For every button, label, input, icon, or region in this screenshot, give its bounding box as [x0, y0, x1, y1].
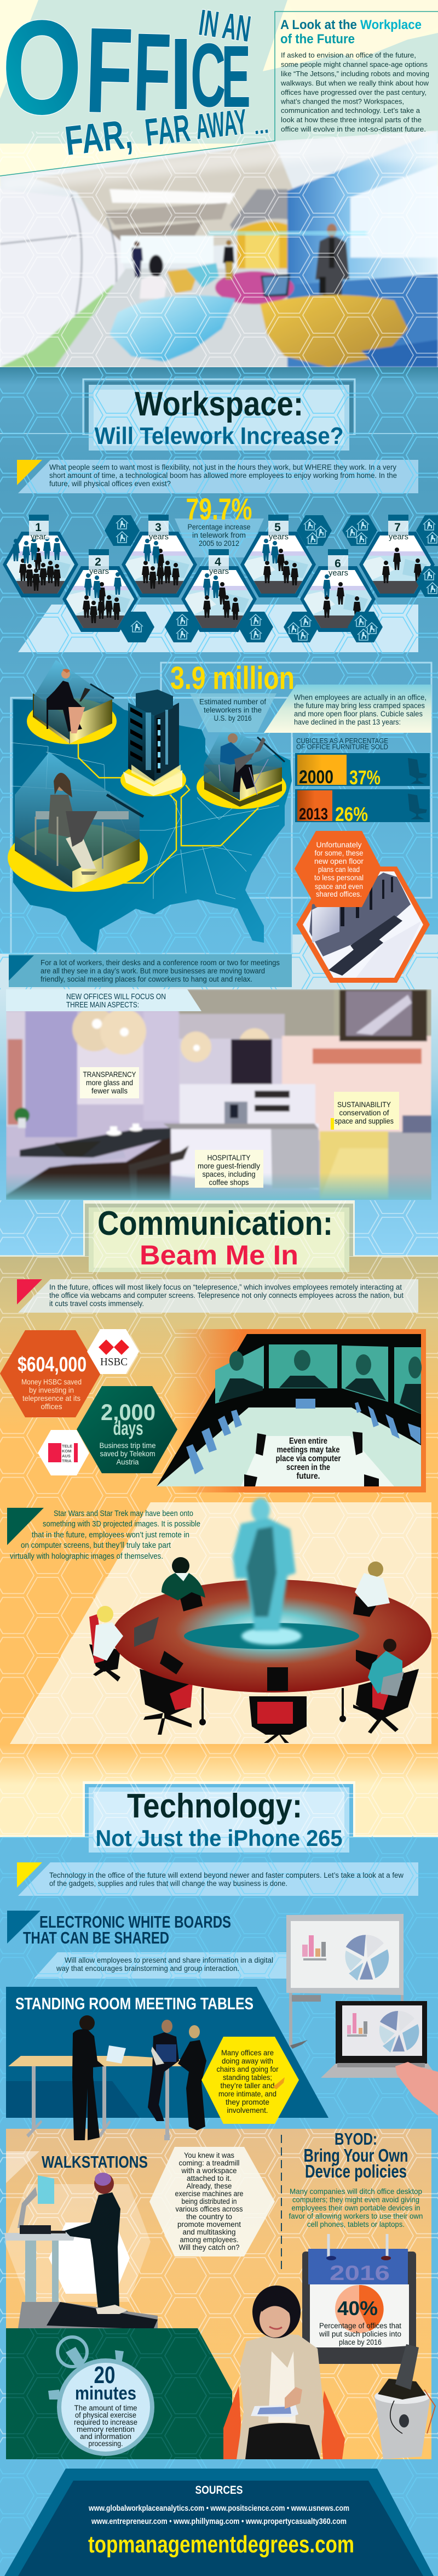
hologram paragraph: [10, 1509, 200, 1561]
title: in an office far, far away: [2, 0, 270, 164]
BYOD heading: [303, 2129, 408, 2181]
photo hexagon: computer lab: [296, 867, 430, 983]
year labels: 5: [274, 521, 281, 534]
intro paragraph: communication and technology. Let’s take a: [281, 106, 420, 115]
stat hexagon: HSBC $604,000: by investing in: [29, 1386, 74, 1394]
hologram paragraph: something with 3D projected images. It is possible: [43, 1519, 200, 1529]
stat hexagon: HSBC $604,000: offices: [41, 1402, 62, 1411]
intro paragraph: office will evolve in the not-so-distant future.: [281, 125, 426, 133]
OFFICE: C: [191, 25, 226, 126]
bar 2013: 2013: [299, 805, 328, 823]
BYOD text: computers; they might even avoid giving: [292, 2195, 419, 2204]
callout: orange hexagon: plans can lead: [318, 865, 360, 874]
year 7: [359, 532, 435, 597]
hologram figure: [233, 1498, 296, 1631]
callout: white hexagon treadmill text: You knew it was: [184, 2151, 234, 2159]
tablet: [251, 2405, 298, 2417]
label: transparency: [80, 1067, 139, 1098]
stat: 79.7 percent: [186, 492, 252, 548]
technology intro text: Technology in the office of the future will extend beyond newer and faster computers. Let’s take a look at a few: [49, 1871, 404, 1879]
dashed divider: [281, 2135, 282, 2272]
stopwatch: 20 minutes: The amount of time: [74, 2404, 137, 2412]
connector lines: [78, 743, 258, 883]
icon: blue triangle: [7, 1911, 41, 1944]
FAR, FAR AWAY: ...: [252, 113, 270, 139]
stopwatch: 20 minutes: and information: [80, 2432, 131, 2441]
faces: [229, 1350, 422, 1378]
stat hexagon: Telekom 2,000 days: Austria: [116, 1457, 139, 1466]
meeting image: video conference: future.: [297, 1472, 320, 1481]
stat hexagon: Telekom 2,000 days: [77, 1386, 177, 1473]
callout: white hexagon treadmill text: and multitasking: [183, 2228, 235, 2236]
callout: white hexagon treadmill text: various offices across: [175, 2205, 243, 2213]
bar 2000: 2000: [299, 767, 333, 788]
label: sustainability: SUSTAINABILITY: [337, 1100, 391, 1109]
tablets: [244, 1432, 379, 1486]
BYOD text: [289, 2187, 423, 2229]
photo: office cafe: THREE MAIN ASPECTS:: [66, 1001, 139, 1010]
cafe scene: [6, 989, 431, 1200]
year labels: 1: [35, 521, 42, 534]
pale floor band under hex row: [18, 605, 418, 652]
hologram paragraph: that in the future, employees won’t just remote in: [32, 1530, 189, 1540]
callout: white hexagon treadmill text: Already, these: [186, 2182, 232, 2190]
label: hospitality: HOSPITALITY: [207, 1153, 251, 1162]
laptop on table: [106, 2045, 126, 2064]
section heading: communication: Beam Me In: [140, 1240, 298, 1270]
OFFICE: [2, 0, 251, 143]
FAR, FAR AWAY: [62, 101, 270, 164]
BYOD text: employees their own portable devices in: [291, 2203, 420, 2212]
subtitle: A Look at the Workplace: [280, 18, 422, 32]
illustration: electronic whiteboard: [286, 1914, 404, 2049]
BYOD heading: Bring Your Own: [303, 2145, 408, 2165]
stopwatch: 20 minutes: of physical exercise: [75, 2411, 136, 2419]
intro paragraph: If asked to envision an office of the future,: [281, 51, 416, 59]
intro paragraph: offices have progressed over the past century,: [281, 88, 427, 96]
stat hexagon: Telekom 2,000 days: Business trip time: [100, 1441, 156, 1450]
icon: yellow triangle: [17, 1862, 42, 1888]
desk and monitor: [4, 2175, 76, 2318]
bar 2013: 26%: [335, 803, 368, 825]
electronic white boards heading: THAT CAN BE SHARED: [23, 1928, 169, 1947]
strip heading: [6, 989, 201, 1011]
hex layer: workspace section: [0, 367, 438, 989]
electronic white boards heading: ELECTRONIC WHITE BOARDS: [39, 1912, 231, 1931]
stat: 79.7 percent: Percentage increase: [187, 523, 251, 531]
section heading: workspace: Will Telework Increase?: [94, 423, 344, 449]
stat hexagon: HSBC $604,000: Money HSBC saved: [21, 1377, 82, 1386]
logo hexagon: Telekom Austria: [38, 1430, 89, 1475]
callout: orange hexagon: to less personal: [314, 873, 364, 882]
hex layer: lower sections: [0, 1200, 438, 1836]
year labels: 4: [215, 556, 221, 568]
stat hexagon: HSBC $604,000: [0, 1330, 101, 1417]
callout: white hexagon treadmill text: [149, 2147, 275, 2256]
callout: open floor plans: When employees are actually in an office,: [294, 693, 427, 702]
label: sustainability: space and supplies: [335, 1116, 394, 1125]
stat: 79.7 percent: 2005 to 2012: [199, 539, 239, 548]
IN AN: IN AN: [197, 2, 253, 50]
callout: yellow hexagon: standing tables;: [223, 2073, 272, 2082]
logo hexagon: Telekom Austria: TELE: [62, 1444, 72, 1449]
subtitle: [280, 18, 422, 47]
label: hospitality: spaces, including: [203, 1170, 255, 1178]
logo hexagon: HSBC: [87, 1329, 139, 1374]
stopwatch: 20 minutes: processing.: [89, 2440, 123, 2448]
bar 2000: [295, 753, 430, 789]
callout: orange hexagon: new open floor: [314, 857, 364, 865]
hologram paragraph: virtually with holographic images of themselves.: [10, 1552, 163, 1561]
footer: sources: [4, 2469, 434, 2576]
intro paragraph: like “The Jetsons,” including robots and moving: [281, 70, 429, 78]
year labels: 3: [155, 521, 162, 534]
callout: yellow hexagon: Many offices are: [221, 2048, 274, 2057]
communication intro text: In the future, offices will most likely focus on “telepresence,” which involves employees remotely interacting at: [49, 1283, 402, 1291]
person middle: [148, 2020, 179, 2121]
frame: communication: [83, 1200, 355, 1272]
OFFICE: I: [170, 17, 192, 131]
year 2: [62, 566, 139, 632]
stopwatch: 20 minutes: required to increase: [74, 2418, 137, 2426]
pale caption hex: 79.7: [175, 518, 264, 557]
year 5: [240, 532, 316, 597]
lower panel: walkstations and byod: [6, 2129, 431, 2459]
label: hospitality: coffee shops: [209, 1178, 249, 1187]
callout: orange hexagon: Unfortunately: [316, 840, 361, 849]
illustration: laptop and hand: [321, 2001, 438, 2116]
illustration: hologram meeting table: [89, 1498, 431, 1743]
hologram paragraph: on computer screens, but they’ll truly take part: [21, 1541, 171, 1550]
bar 2000: 37%: [349, 766, 381, 789]
BYOD heading: BYOD:: [335, 2129, 377, 2148]
logo hexagon: HSBC: HSBC: [100, 1356, 128, 1368]
meeting image: video conference: [157, 1329, 426, 1492]
green suited man: [162, 1557, 205, 1600]
head and hair: [252, 2286, 301, 2338]
meeting image: video conference: Even entire: [289, 1437, 327, 1446]
chart title: OF OFFICE FURNITURE SOLD: [296, 743, 388, 751]
blond woman: [93, 1606, 159, 1661]
home-office icon hexagons: [105, 515, 438, 642]
faint hex on green: [6, 2328, 232, 2459]
workspace intro text: What people seem to want most is flexibility, not just in the hours they work, but WHERE they work. In a very: [49, 463, 396, 471]
year labels: 7: [394, 521, 401, 534]
logo hexagon: Telekom Austria: KOM: [62, 1449, 71, 1454]
illustration: calendar 2016: 2016: [330, 2262, 390, 2285]
year labels: [29, 515, 408, 578]
label: sustainability: conservation of: [339, 1108, 389, 1117]
section heading: communication: Communication:: [97, 1205, 333, 1243]
year 3: [121, 532, 198, 597]
stat: 3.9 million: teleworkers in the: [204, 706, 262, 714]
meeting image: video conference: meetings may take: [277, 1445, 340, 1455]
table top: [112, 1580, 431, 1692]
walkstations heading: WALKSTATIONS: [42, 2152, 148, 2172]
illustration: office tower: [120, 689, 186, 796]
stat: 79.7 percent: in telework from: [192, 531, 246, 539]
year labels: 6: [335, 557, 341, 570]
year labels: year: [31, 533, 46, 542]
panel: exercise green: [6, 2328, 232, 2459]
chart: telework years hexagon sequence: [2, 532, 435, 632]
footer: sources: SOURCES: [195, 2484, 243, 2497]
BYOD text: cell phones, tablets or laptops.: [307, 2220, 405, 2229]
stat hexagon: HSBC $604,000: telepresence at its: [22, 1394, 80, 1403]
person left: [72, 2015, 104, 2140]
stat: 3.9 million: U.S. by 2016: [214, 714, 252, 722]
year labels: years: [389, 533, 408, 542]
pie 40 percent: [335, 2285, 383, 2333]
text box: social meeting places: friendly, social meeting places for coworkers to hang out and relax.: [41, 975, 252, 983]
callout: white hexagon treadmill text: coming: a treadmill: [178, 2159, 240, 2167]
section heading: workspace: Workspace:: [135, 385, 303, 423]
stat hexagon: Telekom 2,000 days: saved by Telekom: [100, 1449, 155, 1458]
technology intro text: [49, 1871, 404, 1888]
communication intro text: the office via webcams and computer screens. Telepresence not only connects employees across the nation, but: [49, 1291, 404, 1300]
callout: white hexagon treadmill text: among employees.: [180, 2236, 239, 2244]
callout: yellow hexagon: doing away with: [222, 2056, 273, 2065]
subtitle: of the Future: [280, 32, 355, 47]
callout: open floor plans: [264, 685, 431, 733]
stopwatch: 20 minutes: [48, 2337, 154, 2456]
stat hexagon: Telekom 2,000 days: days: [113, 1417, 143, 1439]
man in white shirt: [355, 1561, 390, 1607]
board chart: [302, 1935, 389, 1981]
stopwatch: 20 minutes: memory retention: [77, 2425, 135, 2433]
map: United States: [11, 699, 292, 952]
year 4: [181, 566, 257, 632]
logo hexagon: Telekom Austria: AUS: [62, 1454, 71, 1458]
label: sustainability: [331, 1092, 399, 1130]
callout: open floor plans: have declined in the past 13 years:: [294, 718, 401, 726]
teal woman: [368, 1639, 404, 1696]
year labels: years: [89, 567, 109, 576]
callout: white hexagon treadmill text: the country to: [186, 2213, 232, 2221]
stopwatch: 20 minutes: 20: [94, 2362, 115, 2389]
callout: orange hexagon: space and even: [315, 882, 363, 891]
intro paragraph: look at how these three integral parts of the: [281, 116, 422, 124]
hologram paragraph: Star Wars and Star Trek may have been onto: [54, 1509, 193, 1518]
callout: yellow hexagon: involvement.: [227, 2106, 268, 2115]
OFFICE: E: [221, 27, 251, 126]
year 6: [299, 566, 376, 632]
intro paragraph: [280, 51, 429, 133]
conference table: [157, 1407, 421, 1486]
stat: 3.9 million: 3.9 million: [170, 660, 295, 696]
table: [8, 2056, 187, 2066]
callout: yellow hexagon: more intimate, and: [218, 2089, 276, 2098]
callout: open floor plans: and more open floor plans. Cubicle sales: [294, 710, 423, 718]
illustration: woman with tablet: [223, 2286, 345, 2459]
whiteboard description: way that encourages brainstorming and group interaction.: [56, 1964, 239, 1973]
illustration: calendar 2016: [302, 2234, 416, 2364]
FAR, FAR AWAY: FAR: [143, 106, 192, 154]
photo: office cafe: NEW OFFICES WILL FOCUS ON: [66, 993, 166, 1001]
intro panel: technology: [18, 1862, 418, 1896]
label: transparency: TRANSPARENCY: [83, 1070, 136, 1079]
illustration: calendar 2016: 40%: [337, 2297, 378, 2319]
meeting image: video conference: place via computer: [276, 1454, 341, 1463]
callout: white hexagon treadmill text: with a workspace: [181, 2167, 237, 2175]
communication intro text: [49, 1283, 404, 1308]
whiteboard description: [56, 1956, 273, 1973]
illustration: teleworker house top left: [27, 660, 117, 744]
pads on table: [160, 1584, 378, 1691]
intro paragraph: what’s changed the most? Workspaces,: [280, 98, 404, 105]
section heading: workspace: [94, 385, 344, 449]
year labels: years: [269, 533, 289, 542]
workspace intro text: short amount of time, a technological boom has allowed more employees to enjoy working from home. In the: [49, 471, 397, 480]
jacket: [237, 2334, 324, 2459]
label: hospitality: [195, 1150, 263, 1188]
chart title: CUBICLES AS A PERCENTAGE: [296, 737, 388, 745]
year 1: [2, 532, 79, 597]
screens: [215, 1344, 422, 1414]
section heading: technology: Not Just the iPhone 265: [95, 1825, 343, 1851]
person right: [178, 2025, 206, 2130]
binder rings: [328, 2234, 387, 2258]
frame around map: [11, 663, 431, 954]
callout: open floor plans: the future may bring less cramped spaces: [294, 702, 425, 710]
text box: social meeting places: For a lot of workers, their desks and a conference room or two for meetings: [41, 959, 280, 967]
illustration: standing table and people: [8, 2015, 206, 2140]
treadmill: [17, 2302, 158, 2336]
year labels: 2: [95, 556, 101, 568]
footer: sources: topmanagementdegrees.com: [88, 2531, 354, 2558]
whiteboard description: Will allow employees to present and share information in a digital: [65, 1956, 273, 1964]
workspace intro text: future, will physical offices even exist?: [49, 480, 171, 488]
intro paragraph: walkways. But when we really think about how: [280, 79, 429, 87]
intro panel: workspace: [18, 460, 418, 493]
callout: orange hexagon: for some, these: [314, 848, 364, 857]
chart title: [296, 737, 388, 751]
intro paragraph: some people might channel space-age options: [281, 60, 428, 69]
icon: dark green triangle: [7, 1508, 44, 1545]
callout: yellow hexagon: chairs and going for: [217, 2065, 279, 2073]
panel: standing room meeting tables: [6, 1987, 328, 2118]
OFFICE: F: [84, 2, 135, 139]
callout: orange hexagon: [295, 831, 382, 907]
blouse: [268, 2351, 296, 2423]
stat hexagon: HSBC $604,000: $604,000: [18, 1353, 87, 1376]
heading block: section frame for workspace: [83, 379, 355, 451]
panel: standing room meeting tables: STANDING ROOM MEETING TABLES: [15, 1994, 253, 2013]
hologram backdrop: [10, 1502, 431, 1744]
text box: social meeting places: [9, 954, 292, 987]
year labels: years: [328, 569, 348, 578]
callout: white hexagon treadmill text: promote movement: [177, 2220, 241, 2229]
callout: white hexagon treadmill text: being distributed in: [182, 2197, 237, 2205]
footer: sources: www.globalworkplaceanalytics.com • www.positscience.com • www.usnews.com: [88, 2504, 349, 2513]
callout: yellow hexagon: they promote: [226, 2098, 269, 2106]
header rule: [0, 12, 438, 176]
callout: yellow hexagon: [201, 2037, 299, 2124]
label: hospitality: more guest-friendly: [198, 1161, 260, 1170]
whiteboard caption panel: [34, 1952, 287, 1979]
callout: white hexagon treadmill text: attached to it.: [187, 2174, 232, 2182]
meeting image: video conference: screen in the: [286, 1463, 330, 1472]
illustration: calendar 2016: Percentage of offices that: [319, 2322, 401, 2330]
year labels: years: [209, 567, 229, 576]
illustration: calendar 2016: will put such policies into: [319, 2330, 401, 2338]
workspace intro text: [49, 463, 397, 488]
skirt: [245, 2423, 320, 2459]
stat hexagon: Telekom 2,000 days: 2,000: [101, 1399, 155, 1425]
callout: white hexagon treadmill text: exercise machines are: [175, 2190, 243, 2198]
bar 2013: [295, 789, 430, 825]
person: [65, 2173, 131, 2313]
logo hexagon: Telekom Austria: TRIA: [62, 1458, 72, 1463]
header photo: futuristic office: [0, 126, 438, 367]
illustration: trash can with old computer: [374, 2344, 435, 2459]
section heading: technology: Technology:: [127, 1787, 302, 1825]
illustration: walkstation: [4, 2173, 158, 2336]
bar chart: cubicles percentage: [292, 737, 430, 825]
footer: sources: www.entrepreneur.com • www.phillymag.com • www.propertycasualty360.com: [91, 2517, 347, 2526]
frame: technology: [83, 1781, 355, 1853]
electronic white boards heading: [23, 1912, 231, 1947]
section heading: technology: [95, 1787, 343, 1851]
intro panel: communication: [18, 1279, 418, 1313]
icon: red triangle: [17, 1279, 42, 1304]
year labels: years: [149, 533, 169, 542]
decorative hex layer: photo: [0, 132, 438, 367]
illustration: teleworker house right: [197, 726, 286, 809]
stat: 79.7 percent: 79.7%: [186, 492, 252, 526]
stat: 3.9 million: Estimated number of: [199, 698, 266, 706]
label: transparency: more glass and: [86, 1078, 133, 1087]
walkstations heading: [6, 2151, 148, 2183]
illustration: calendar 2016: place by 2016: [339, 2338, 382, 2346]
callout: white hexagon treadmill text: Will they catch on?: [178, 2243, 240, 2252]
hex layer: technology: [0, 1836, 438, 2576]
label: transparency: fewer walls: [91, 1086, 128, 1095]
BYOD heading: Device policies: [305, 2161, 407, 2181]
OFFICE: F: [132, 10, 172, 135]
text box: social meeting places: are all they see in a day’s work. But more businesses are moving toward: [41, 967, 265, 975]
chairs: [186, 1399, 420, 1474]
section heading: communication: [97, 1205, 333, 1270]
callout: yellow hexagon: they’re taller and: [220, 2081, 275, 2090]
illustration: teleworker house bottom left: [8, 752, 148, 892]
BYOD text: Many companies will ditch office desktop: [290, 2187, 422, 2196]
communication intro text: it cuts travel costs immensely.: [49, 1300, 144, 1308]
FAR, FAR AWAY: AWAY: [193, 101, 249, 147]
photo: office cafe: [6, 989, 431, 1200]
stat: 3.9 million: [170, 660, 295, 732]
chairs under table: [89, 1644, 419, 1743]
stopwatch: 20 minutes: minutes: [75, 2383, 136, 2404]
icon: yellow triangle: [17, 460, 42, 485]
technology intro text: of the gadgets, supplies and rules that will change the way business is done.: [49, 1879, 287, 1888]
BYOD text: favor of allowing workers to use their own: [289, 2212, 423, 2220]
FAR, FAR AWAY: FAR,: [62, 111, 135, 164]
orange chair: [223, 2386, 345, 2459]
callout: orange hexagon: shared offices.: [316, 890, 362, 898]
